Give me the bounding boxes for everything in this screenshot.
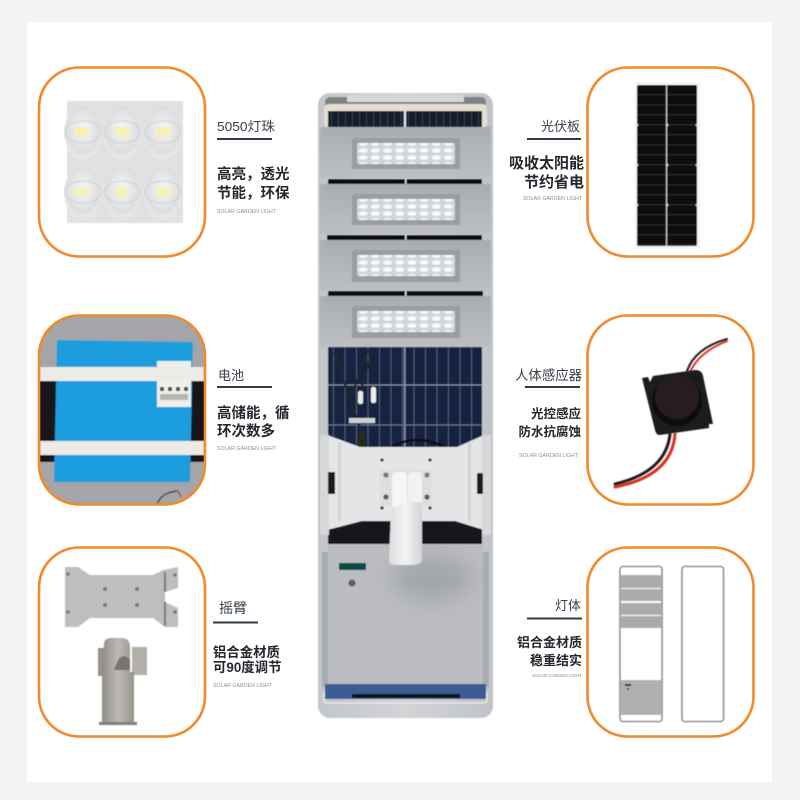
heading: 摇臂 bbox=[219, 600, 247, 616]
description bbox=[517, 635, 582, 668]
underline bbox=[217, 386, 272, 388]
underline bbox=[217, 138, 272, 140]
gaps between light modules bbox=[327, 179, 483, 296]
lamp body front view bbox=[620, 566, 662, 722]
panel: battery bbox=[38, 315, 290, 505]
description: 吸收太阳能 bbox=[509, 154, 584, 172]
sensor plate bbox=[642, 370, 713, 435]
heading: 电池 bbox=[218, 368, 244, 383]
adjustable arm bbox=[380, 470, 432, 508]
pole sleeve bbox=[389, 500, 422, 565]
orange frame bbox=[39, 548, 205, 736]
blue battery pack bbox=[54, 340, 193, 482]
description: 高储能，循 bbox=[217, 404, 290, 422]
orange frame bbox=[39, 68, 205, 256]
lamp body back frame bbox=[682, 566, 724, 722]
description: 稳重结实 bbox=[530, 653, 582, 668]
orange frame bbox=[588, 316, 754, 504]
panel: body sensor bbox=[515, 316, 754, 504]
light module 2 bbox=[320, 184, 491, 234]
description: 铝合金材质 bbox=[213, 644, 280, 660]
caption: SOLAR GARDEN LIGHT bbox=[523, 196, 583, 202]
product: solar street light body bbox=[318, 93, 493, 718]
spec label bbox=[157, 361, 191, 407]
description: 防水抗腐蚀 bbox=[518, 424, 581, 439]
battery photo bbox=[38, 315, 205, 505]
caption: SOLAR GARDEN LIGHT bbox=[213, 683, 273, 689]
caption: SOLAR GARDEN LIGHT bbox=[217, 446, 277, 452]
description: 节能，环保 bbox=[217, 184, 290, 202]
description: 高亮，透光 bbox=[217, 165, 290, 183]
heading: 灯体 bbox=[555, 598, 581, 613]
arm casting bbox=[98, 638, 147, 725]
underline bbox=[525, 386, 580, 388]
caption: SOLAR GARDEN LIGHT bbox=[532, 673, 582, 678]
panel: LED beads bbox=[39, 68, 290, 256]
light module 1 bbox=[320, 127, 491, 178]
wires bbox=[157, 491, 178, 504]
description: 环次数多 bbox=[217, 422, 275, 440]
LED lens photo bbox=[64, 101, 183, 223]
description bbox=[217, 165, 290, 202]
heading: 光伏板 bbox=[541, 119, 580, 134]
underline bbox=[527, 138, 581, 140]
description: 可90度调节 bbox=[213, 659, 281, 675]
description bbox=[518, 406, 581, 439]
battery cover bbox=[322, 544, 489, 687]
label icons bbox=[160, 387, 188, 400]
orange frame bbox=[39, 316, 205, 504]
description: 铝合金材质 bbox=[517, 635, 582, 650]
panel: solar panel bbox=[509, 68, 754, 256]
underline bbox=[527, 618, 582, 620]
light module 3 bbox=[320, 240, 491, 291]
junction dots bbox=[636, 124, 698, 206]
panel: lamp body bbox=[517, 548, 754, 736]
description: 节约省电 bbox=[524, 173, 584, 191]
sensor wires bbox=[615, 339, 727, 487]
description: 光控感应 bbox=[531, 406, 581, 421]
underline bbox=[213, 622, 258, 624]
description bbox=[213, 644, 281, 675]
orange frame bbox=[588, 68, 754, 256]
description bbox=[217, 404, 290, 440]
heading: 5050灯珠 bbox=[217, 119, 275, 134]
straps bbox=[40, 367, 204, 455]
solar panel window bbox=[328, 347, 482, 448]
description bbox=[509, 154, 584, 191]
panel: swing arm bbox=[39, 548, 281, 736]
lens array bbox=[64, 105, 182, 219]
mounting bracket bbox=[320, 435, 491, 535]
heading: 人体感应器 bbox=[515, 367, 583, 383]
lamp housing frame bbox=[318, 93, 493, 718]
caption: SOLAR GARDEN LIGHT bbox=[217, 209, 277, 215]
light module 4 bbox=[320, 296, 491, 347]
mounting plate bbox=[65, 567, 178, 627]
caption: SOLAR GARDEN LIGHT bbox=[519, 453, 579, 459]
top cap bbox=[324, 95, 487, 128]
bottom solar strip bbox=[324, 684, 487, 703]
orange frame bbox=[588, 548, 754, 736]
solar module bbox=[635, 82, 700, 249]
lower solar strip bbox=[328, 521, 482, 544]
